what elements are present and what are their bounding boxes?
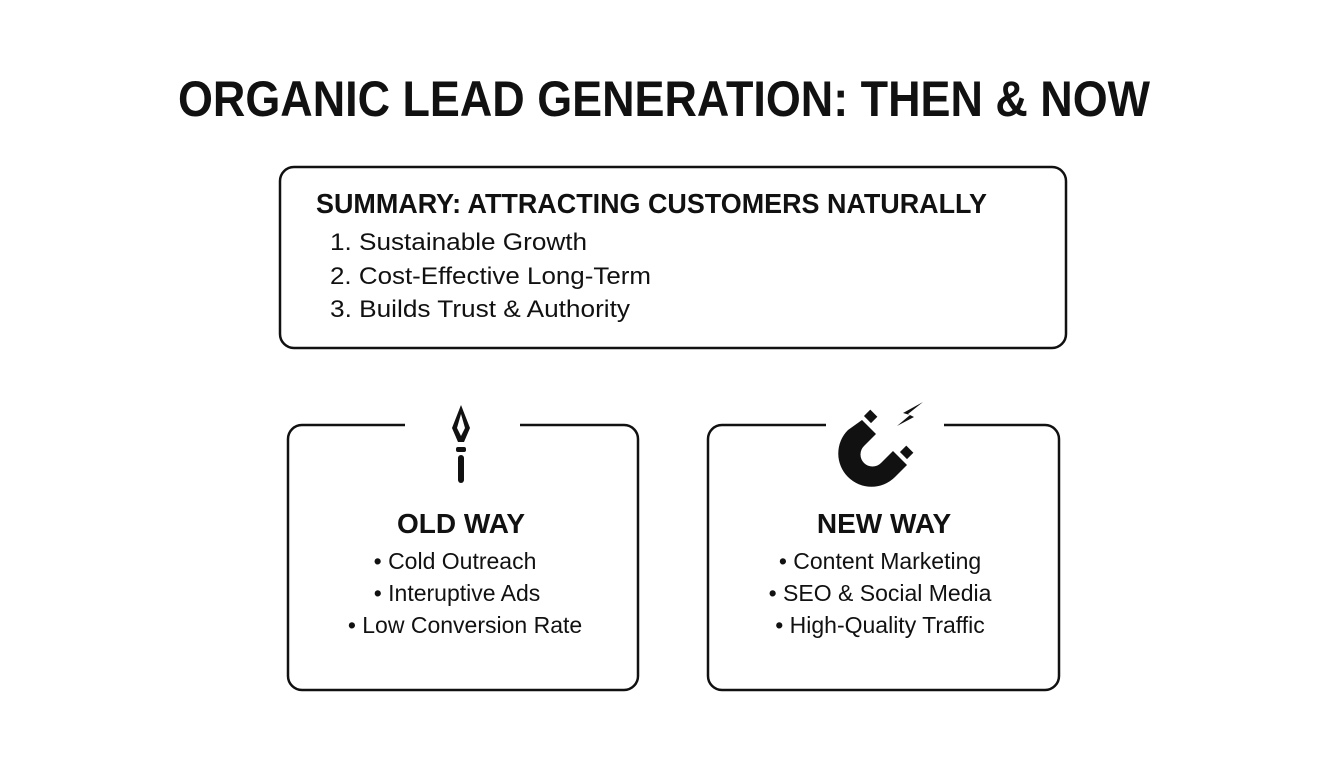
panel: summary [280,167,1066,348]
summary list [330,229,651,323]
icon: spear [452,405,470,483]
new way bullets: • Content Marketing [779,548,981,574]
new way heading: NEW WAY [817,508,951,539]
summary heading: SUMMARY: ATTRACTING CUSTOMERS NATURALLY [316,188,987,219]
panel: old way [288,405,638,690]
title: ORGANIC LEAD GENERATION: THEN & NOW [178,71,1151,127]
old way bullets: • Low Conversion Rate [348,612,582,638]
panel: new way [708,402,1059,690]
old way heading: OLD WAY [397,508,525,539]
summary list: 2. Cost-Effective Long-Term [330,263,651,290]
new way bullets: • High-Quality Traffic [775,612,985,638]
new way bullets [769,548,992,638]
old way bullets: • Interuptive Ads [374,580,540,606]
summary list: 3. Builds Trust & Authority [330,296,630,323]
summary list: 1. Sustainable Growth [330,229,587,256]
new way bullets: • SEO & Social Media [769,580,992,606]
old way bullets [348,548,582,638]
icon: magnet [838,402,923,487]
old way bullets: • Cold Outreach [374,548,536,574]
